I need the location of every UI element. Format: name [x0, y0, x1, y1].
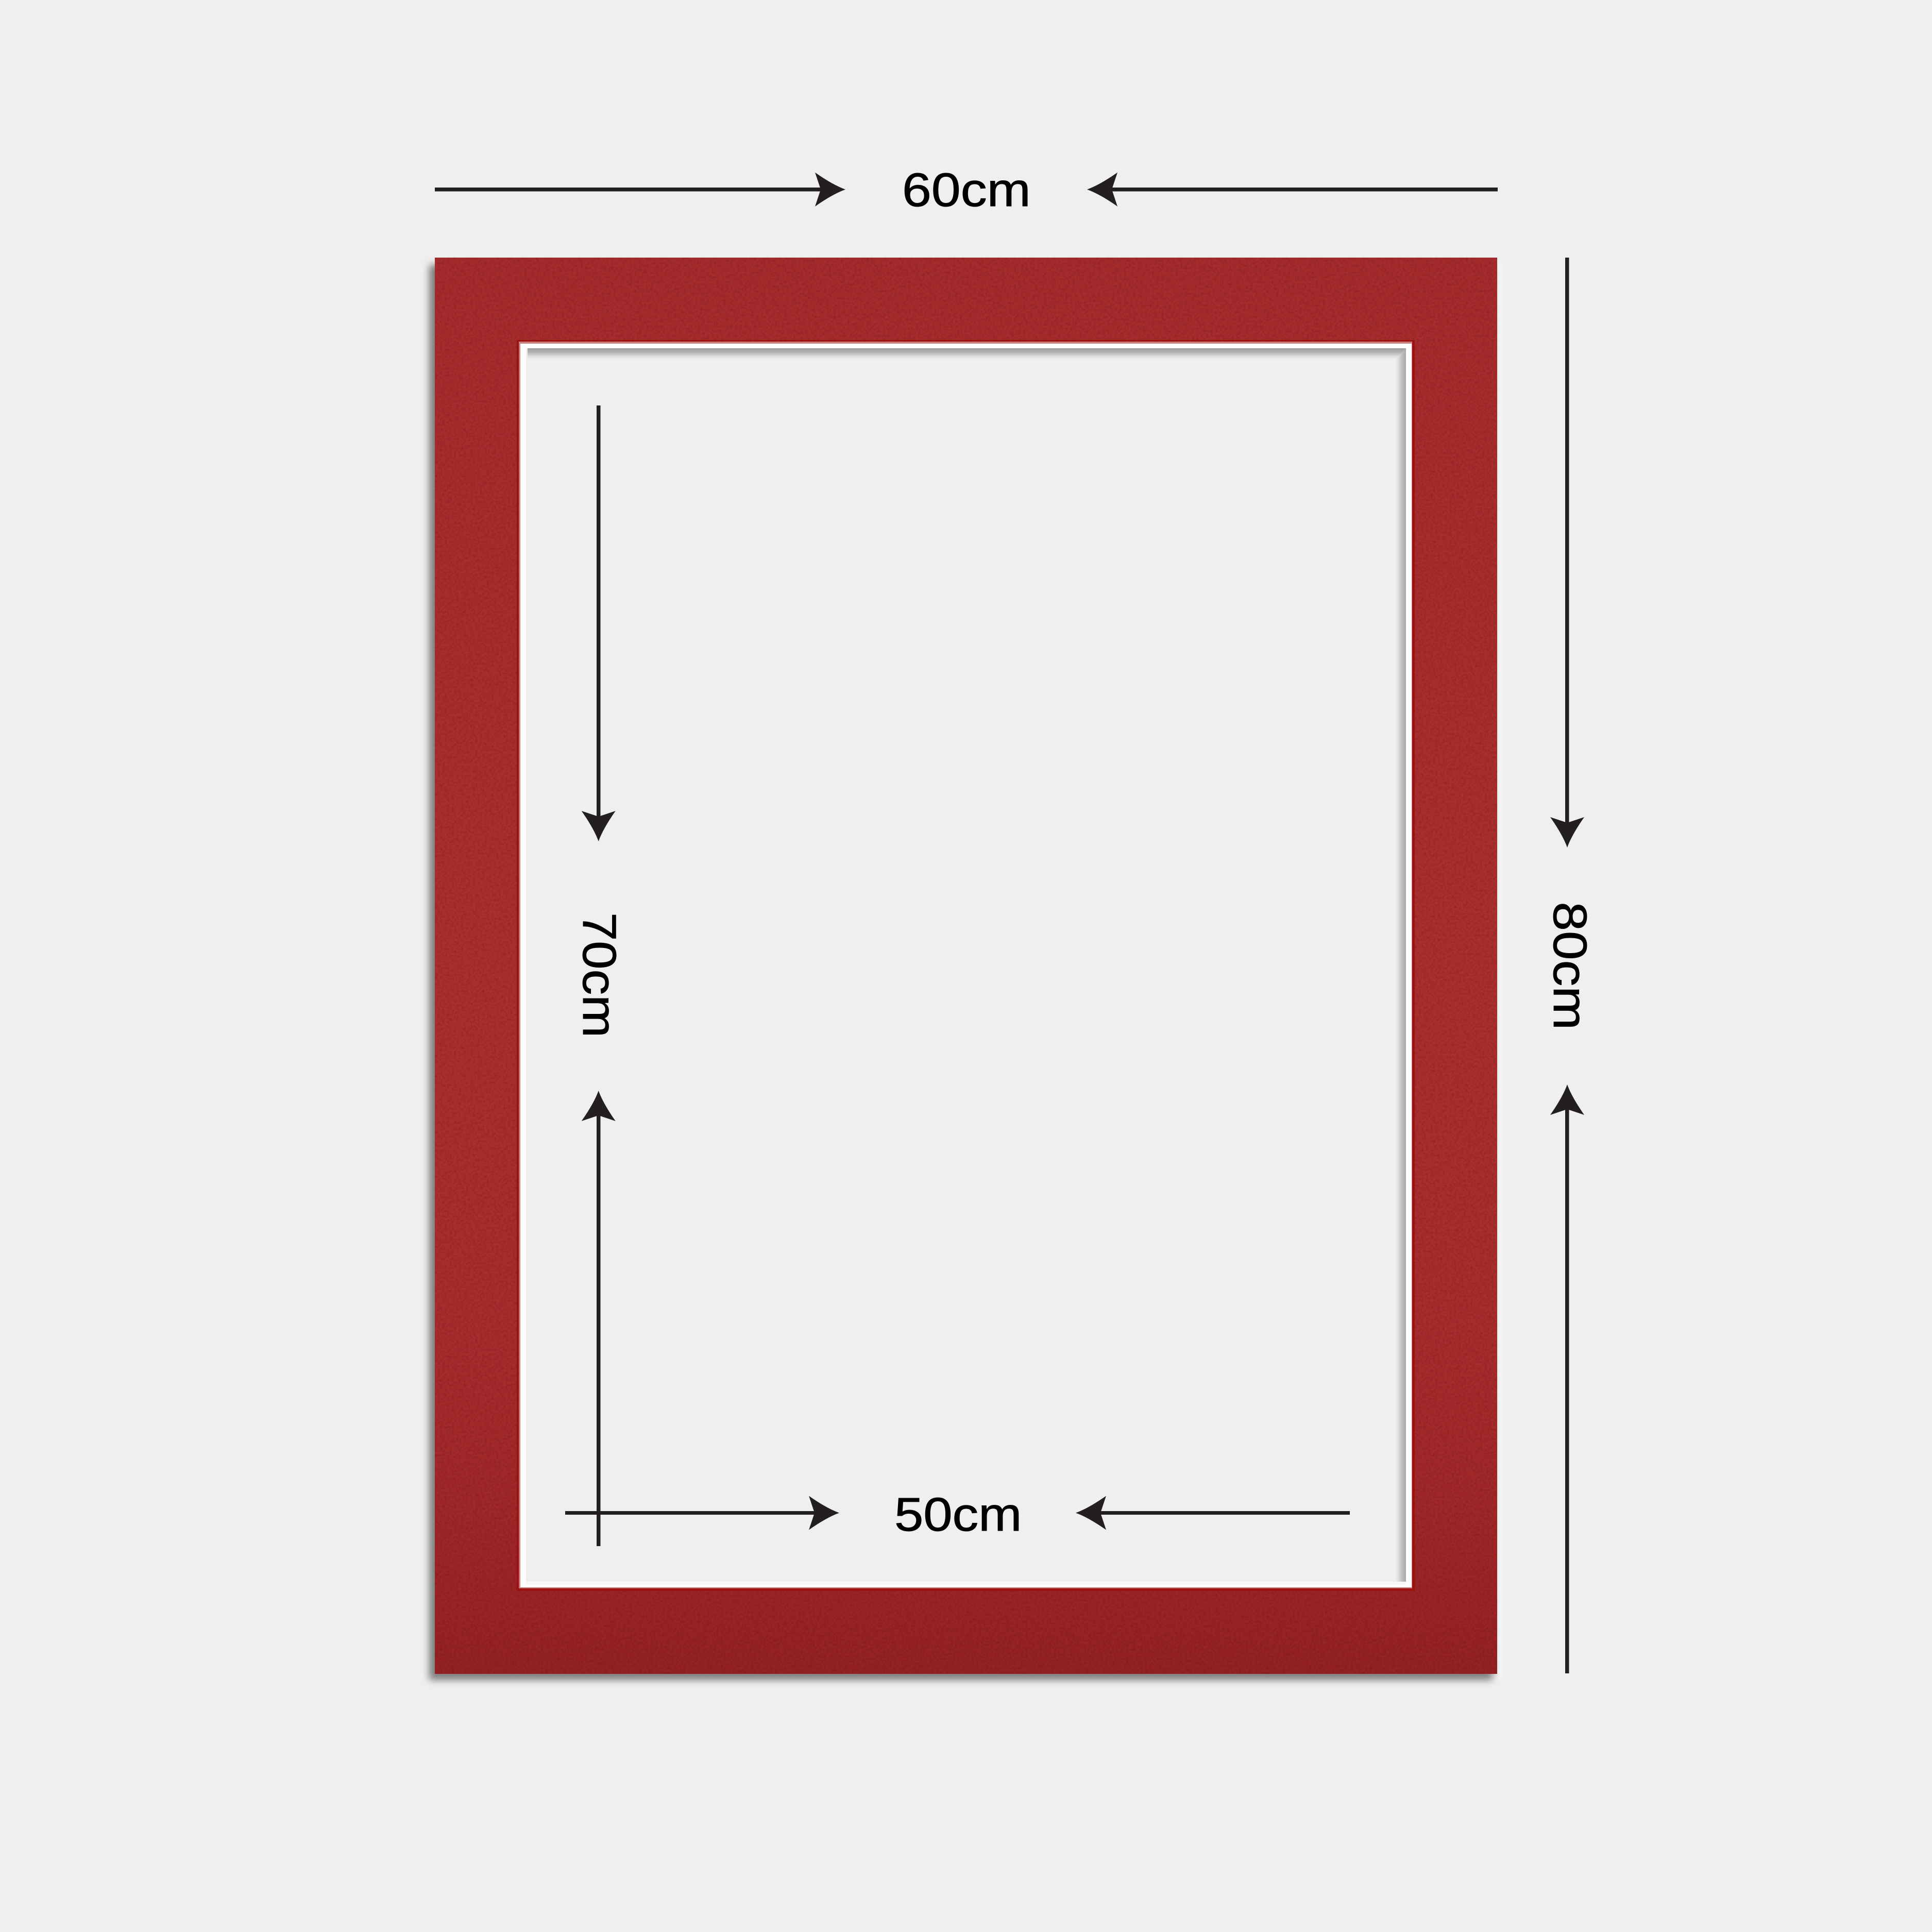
top width arrow, left half [435, 173, 845, 207]
label: outer height 80cm: 80cm [1544, 902, 1597, 1030]
mat aperture bevel [517, 340, 1415, 1591]
label: inner width 50cm: 50cm [894, 1488, 1022, 1541]
outer height arrow, lower half [1550, 1084, 1584, 1673]
inner height arrow, lower half [582, 1091, 616, 1546]
inner height arrow, upper half [582, 405, 616, 841]
inner width arrow, right half [1076, 1496, 1350, 1530]
label: inner height 70cm: 70cm [573, 912, 626, 1038]
red mat frame [435, 258, 1497, 1674]
outer height arrow, upper half [1550, 258, 1584, 848]
top width arrow, right half [1087, 173, 1498, 207]
label: outer width 60cm: 60cm [902, 163, 1031, 216]
inner width arrow, left half [565, 1496, 839, 1530]
frame drop shadow [429, 263, 1502, 1680]
